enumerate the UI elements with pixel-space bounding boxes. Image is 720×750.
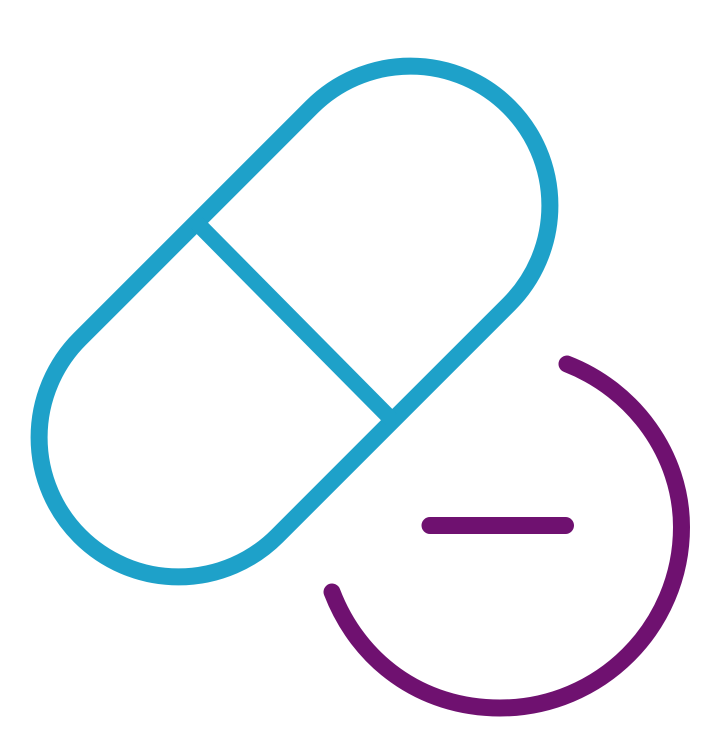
icon: tablet — [332, 364, 682, 708]
tablet score line — [430, 517, 566, 534]
capsule outline — [39, 66, 550, 577]
capsule divider — [197, 223, 391, 419]
tablet arc — [332, 364, 682, 708]
icon: capsule — [39, 66, 550, 577]
